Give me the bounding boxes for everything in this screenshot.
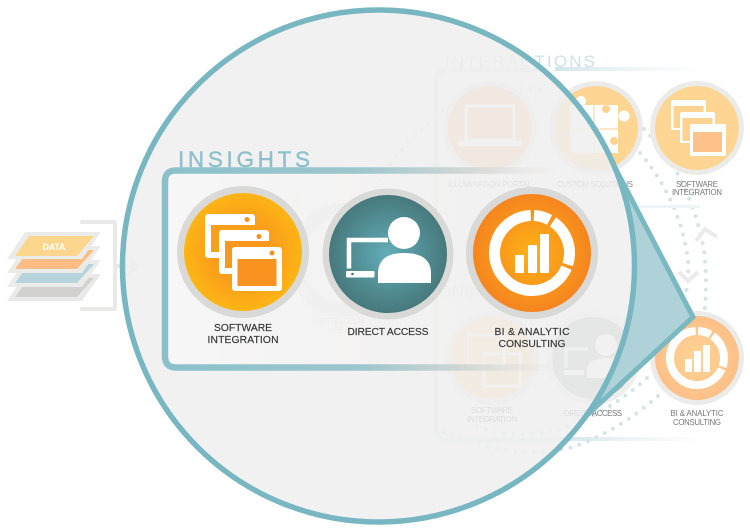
data label: DATA bbox=[42, 242, 66, 252]
software integration upper right bbox=[650, 81, 744, 197]
background: faded pipeline diagram bbox=[357, 56, 744, 452]
label bbox=[208, 323, 278, 346]
illumination portal bbox=[443, 81, 537, 189]
direct access lower bbox=[546, 311, 640, 418]
icon: stacked windows bbox=[205, 214, 282, 291]
bi and analytic consulting lower right: BI & ANALYTIC bbox=[670, 409, 724, 418]
magnifier wedge bbox=[588, 165, 696, 418]
pale bars bbox=[555, 67, 705, 71]
bi and analytic consulting lower right bbox=[650, 311, 744, 427]
label: BI & ANALYTIC bbox=[494, 327, 570, 338]
bracket and arrow bbox=[82, 222, 137, 309]
ring and disc bbox=[466, 187, 598, 319]
insights heading: INSIGHTS bbox=[178, 147, 310, 172]
destination area bbox=[295, 210, 395, 335]
custom solutions: CUSTOM SOLUTIONS bbox=[557, 180, 633, 189]
label bbox=[494, 327, 570, 350]
icon: ring chart with bars bbox=[493, 214, 571, 292]
magnifier circle fill bbox=[122, 10, 634, 522]
label: DIRECT ACCESS bbox=[348, 327, 429, 338]
magnifier circle outline bbox=[122, 10, 634, 522]
illumination engine bbox=[193, 215, 293, 335]
software integration lower: INTEGRATION bbox=[467, 415, 517, 424]
illumination engine: ILLUMINATION bbox=[214, 318, 272, 327]
data layers stack bbox=[7, 232, 101, 301]
destination area: DESTINATION bbox=[314, 317, 364, 326]
software integration upper right: SOFTWARE bbox=[676, 180, 718, 189]
direct access card bbox=[322, 188, 454, 338]
software integration lower: SOFTWARE bbox=[471, 406, 513, 415]
ring and disc bbox=[177, 186, 309, 318]
bi and analytic consulting lower right: CONSULTING bbox=[673, 418, 721, 427]
integrations heading: INTEGRATIONS bbox=[349, 282, 475, 301]
dotted connector paths bbox=[370, 88, 706, 452]
interactions heading: INTERACTIONS bbox=[445, 52, 595, 71]
destination area: AREA bbox=[328, 326, 351, 335]
custom solutions bbox=[549, 81, 643, 189]
software integration lower bbox=[445, 311, 539, 424]
faint panel outline bbox=[436, 70, 676, 440]
insights panel bbox=[165, 170, 560, 368]
bi and analytic consulting card bbox=[466, 187, 598, 350]
icon: person at laptop bbox=[346, 217, 431, 283]
label: INTEGRATION bbox=[208, 335, 278, 346]
illumination engine: ENGINE bbox=[227, 326, 259, 335]
label: CONSULTING bbox=[498, 339, 566, 350]
ring and disc bbox=[322, 188, 454, 320]
chevrons bbox=[679, 229, 717, 281]
direct access lower: DIRECT ACCESS bbox=[564, 409, 622, 418]
illumination portal: ILLUMINATION PORTAL bbox=[448, 180, 533, 189]
software integration card bbox=[177, 186, 309, 346]
label: SOFTWARE bbox=[214, 323, 272, 334]
illuminations heading: ILLUMINATIONS bbox=[171, 192, 301, 211]
software integration upper right: INTEGRATION bbox=[672, 188, 722, 197]
